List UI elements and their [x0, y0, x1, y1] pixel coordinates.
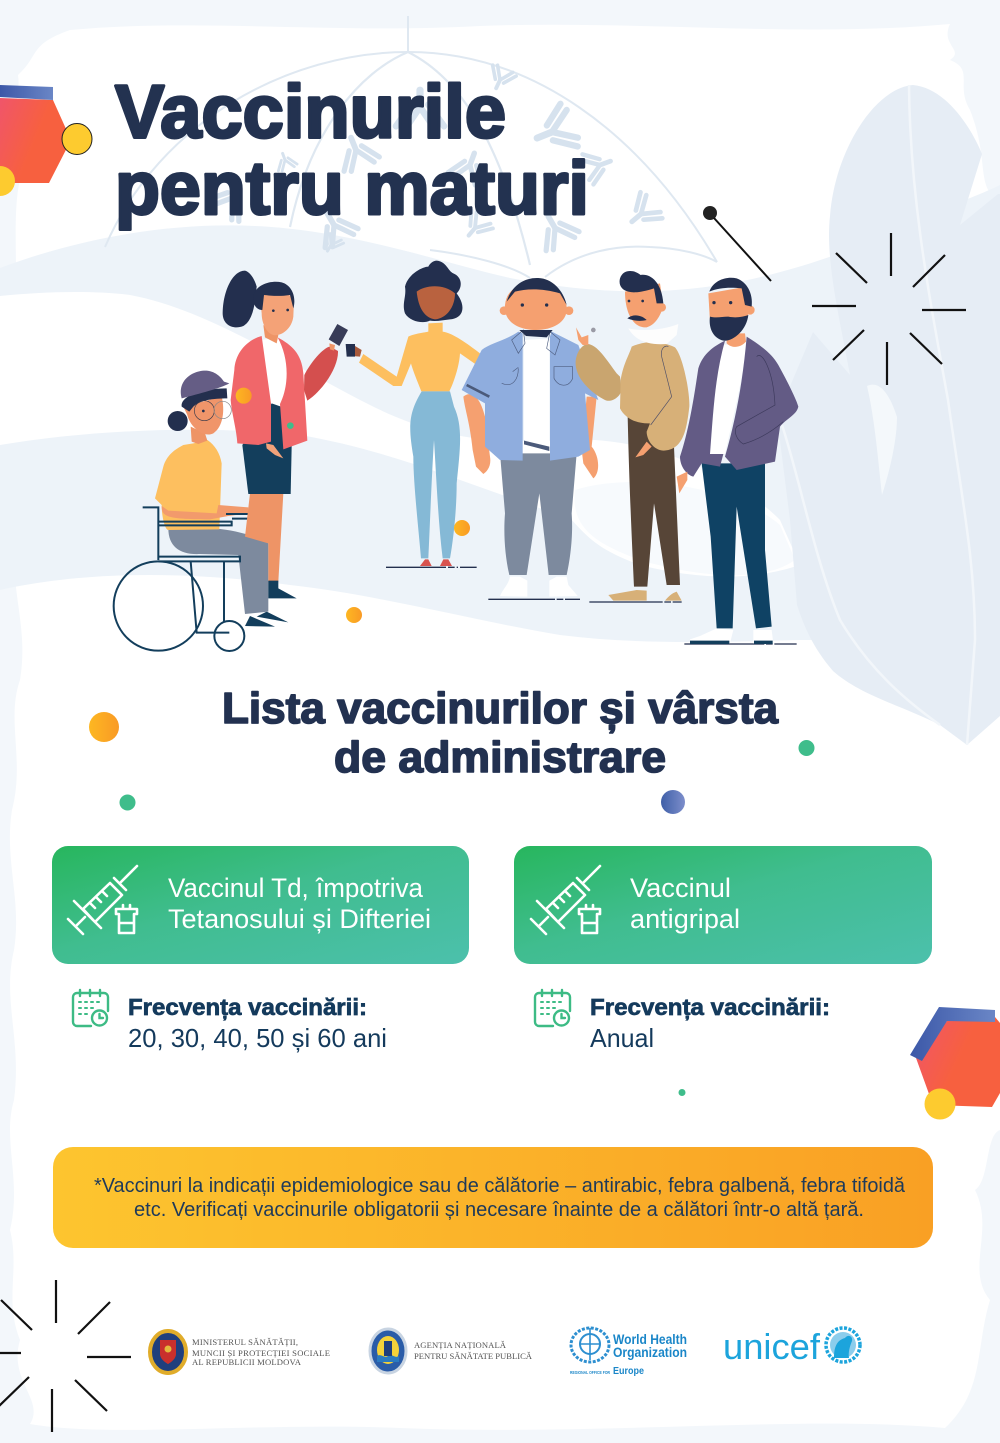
card text: Vaccinul Td, împotriva — [168, 873, 424, 903]
card text: antigripal — [630, 904, 740, 934]
tee — [710, 342, 747, 454]
panel: Td vaccine — [52, 846, 469, 1053]
trousers — [628, 417, 680, 587]
person: woman with phone — [223, 271, 348, 598]
callout: travel note: etc. Verificați vaccinurile obligatorii și necesare înainte de a călători într-o altă țară. — [134, 1199, 864, 1221]
collar — [512, 330, 560, 355]
shoes — [500, 577, 578, 597]
head — [708, 287, 749, 322]
card text — [168, 873, 431, 934]
jacket — [680, 337, 798, 477]
shoes — [420, 559, 452, 566]
jeans — [410, 391, 460, 558]
frequency: 20, 30, 40, 50 și 60 ani — [128, 1023, 387, 1053]
card text — [630, 873, 740, 934]
scarf — [628, 324, 678, 344]
logo: unicef: unicef — [723, 1326, 821, 1367]
frequency — [128, 994, 387, 1053]
ground line — [488, 597, 580, 601]
icon: syringe — [68, 866, 137, 934]
hexagon: right — [910, 1007, 1000, 1120]
frequency: Frecvența vaccinării: — [128, 994, 367, 1021]
frequency: Anual — [590, 1023, 654, 1053]
person: man with moustache — [576, 271, 689, 602]
logo: ministry: AL REPUBLICII MOLDOVA — [192, 1357, 302, 1367]
hand — [266, 443, 283, 458]
shirt — [155, 440, 222, 530]
eye — [202, 410, 205, 412]
card text: Tetanosului și Difteriei — [168, 904, 431, 934]
neck and top — [359, 323, 480, 391]
neck — [191, 427, 207, 444]
pockets — [502, 367, 573, 385]
shoes — [690, 628, 773, 643]
person: bearded man in jacket — [677, 278, 798, 644]
ground line — [684, 642, 797, 646]
hand with cup — [346, 344, 362, 357]
subtitle: de administrare — [334, 733, 666, 782]
wheelchair frame — [114, 514, 253, 651]
head — [505, 283, 567, 330]
hexagon: top left — [0, 85, 92, 196]
card — [52, 846, 469, 964]
leaf decoration — [777, 85, 1000, 745]
callout: travel note — [53, 1147, 933, 1248]
face — [183, 397, 223, 435]
hair — [507, 278, 567, 305]
card text: Vaccinul — [630, 873, 731, 903]
face — [260, 292, 294, 335]
hair — [620, 271, 663, 303]
logo: WHO: Europe — [613, 1366, 644, 1377]
jeans — [702, 463, 772, 628]
decorative dots — [236, 388, 294, 429]
glasses — [194, 401, 231, 421]
moustache — [627, 315, 647, 321]
head — [625, 283, 663, 327]
logo: WHO: Organization — [613, 1344, 687, 1360]
umbrella tip — [703, 206, 771, 281]
neck — [519, 330, 553, 337]
logo: WHO: REGIONAL OFFICE FOR — [570, 1370, 611, 1375]
beard — [710, 315, 748, 341]
arm — [304, 347, 338, 401]
hair — [253, 282, 294, 310]
icon: calendar — [535, 990, 570, 1026]
wheelchair back — [143, 507, 158, 560]
ponytail — [223, 271, 257, 327]
sweater — [620, 342, 689, 451]
ground line — [386, 565, 477, 569]
shirt — [462, 332, 598, 461]
shoes — [608, 590, 682, 601]
title: pentru maturi — [115, 146, 589, 230]
hand — [677, 472, 687, 493]
logo: ministry: MUNCII ȘI PROTECȚIEI SOCIALE — [192, 1348, 330, 1359]
card — [514, 846, 932, 964]
boots — [268, 581, 297, 598]
logo: ministry — [150, 1331, 330, 1373]
logo: WHO: World Health — [613, 1331, 687, 1347]
ground line — [589, 600, 682, 604]
shoes — [245, 612, 288, 627]
trousers — [500, 453, 577, 575]
decorative dots — [89, 520, 814, 1096]
trousers — [168, 528, 268, 614]
jacket — [231, 336, 307, 449]
face — [417, 286, 455, 319]
logo: agency — [370, 1329, 533, 1373]
neck — [727, 333, 746, 347]
title — [115, 70, 589, 230]
callout: travel note: *Vaccinuri la indicații epidemiologice sau de călătorie – antirabic, febra galbenă, febra tifoidă — [94, 1175, 906, 1197]
features — [521, 303, 548, 307]
title: Vaccinurile — [115, 70, 506, 154]
starburst: bottom left — [0, 1280, 131, 1432]
hair — [404, 261, 462, 322]
features — [272, 309, 289, 312]
person: woman in yellow top — [346, 261, 480, 567]
raised arm — [576, 344, 622, 401]
logo: agency: PENTRU SĂNĂTATE PUBLICĂ — [414, 1351, 533, 1361]
skirt — [242, 403, 292, 494]
panel: flu vaccine — [514, 846, 932, 1053]
subtitle — [222, 684, 779, 782]
phone — [329, 324, 348, 351]
icon: syringe — [531, 866, 600, 934]
subtitle: Lista vaccinurilor și vârsta — [222, 684, 779, 733]
icon: calendar — [73, 990, 108, 1026]
logo: agency: AGENȚIA NAȚIONALĂ — [414, 1340, 507, 1351]
hair bun — [168, 411, 188, 431]
person: woman in wheelchair — [114, 371, 288, 651]
neck — [263, 325, 278, 343]
hand and flower — [576, 327, 596, 345]
logo: WHO — [570, 1328, 687, 1377]
legs — [245, 493, 283, 582]
hand — [635, 442, 652, 457]
starburst: top right — [812, 233, 966, 385]
logo: ministry: MINISTERUL SĂNĂTĂȚII, — [192, 1337, 298, 1348]
cap — [181, 371, 229, 398]
tee — [261, 337, 286, 404]
frequency — [590, 994, 830, 1053]
dome with antibodies — [105, 16, 717, 278]
arms skin — [463, 394, 598, 478]
hair — [709, 278, 752, 307]
frequency: Frecvența vaccinării: — [590, 994, 830, 1021]
forearm — [162, 505, 248, 519]
person: man in denim shirt — [462, 278, 598, 599]
